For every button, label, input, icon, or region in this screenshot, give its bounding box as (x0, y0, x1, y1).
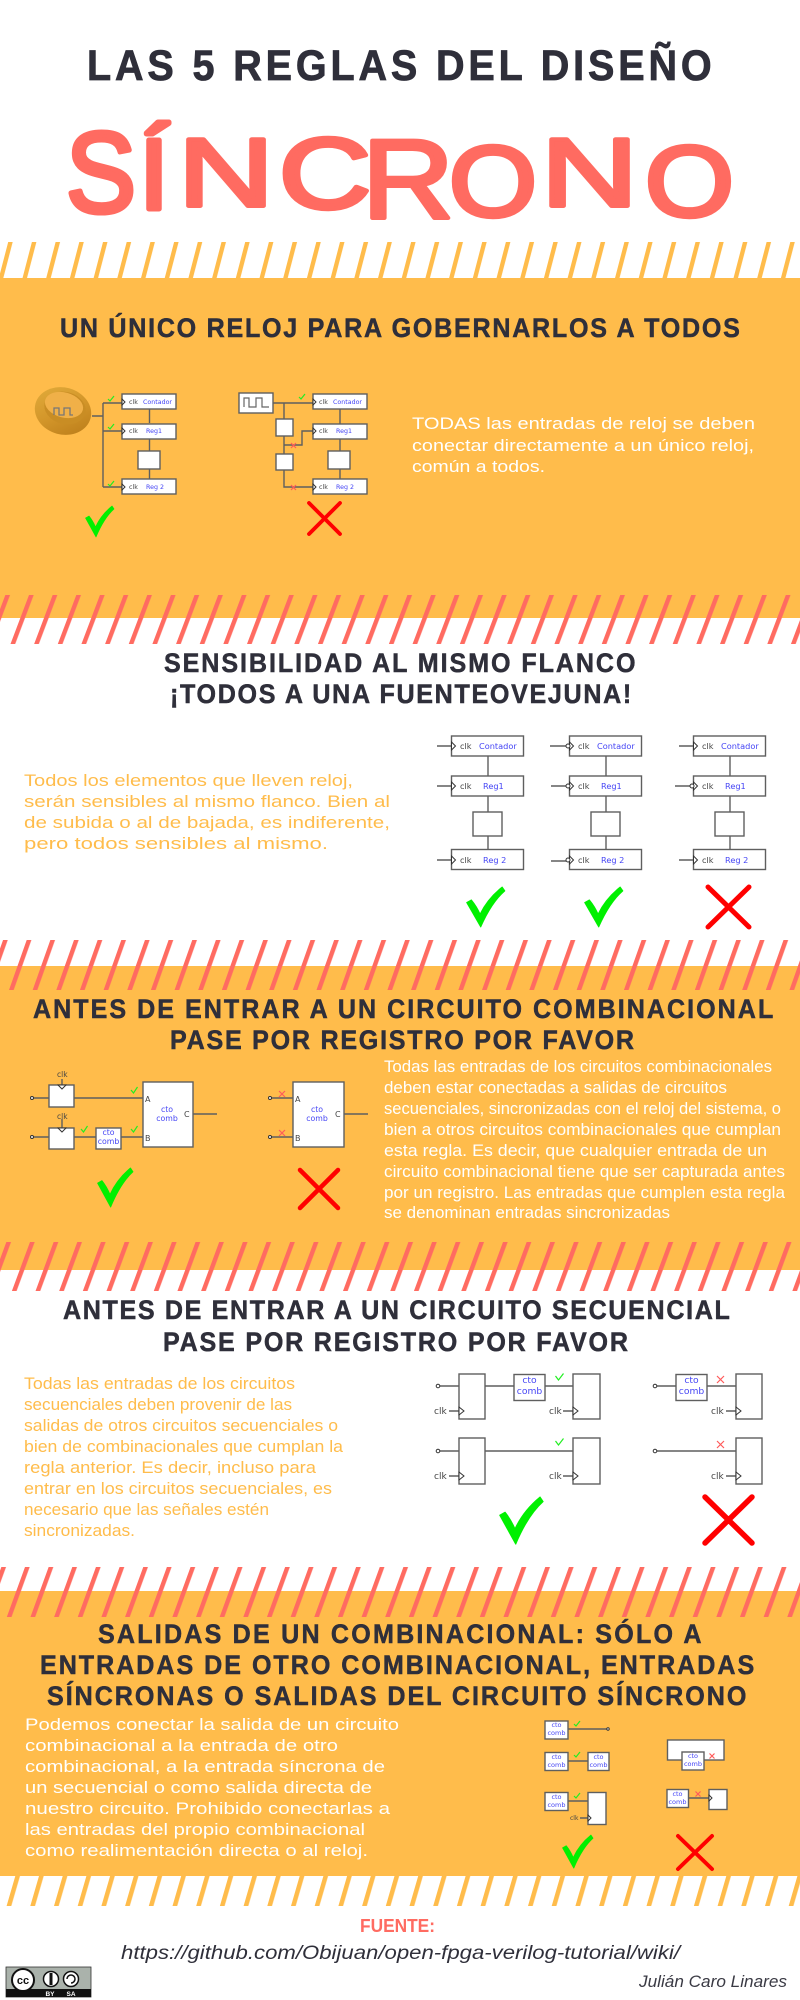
title: síncrono: R (362, 117, 454, 242)
text: regla 5 (25, 1716, 399, 1860)
text: regla 2: de subida o al de bajada, es indiferente, (24, 814, 390, 832)
diagram: correct sequential inputs: comb (517, 1386, 542, 1397)
diagram: wrong sequential inputs: comb (679, 1386, 704, 1397)
text: regla 4: regla anterior. Es decir, incluso para (24, 1459, 317, 1477)
text: regla 4 (24, 1375, 344, 1540)
text: regla 1: común a todos. (412, 458, 545, 476)
text: regla 4: secuenciales deben provenir de las (24, 1396, 292, 1414)
diagram: falling edge registers: Contador (597, 741, 635, 751)
diagram: wrong combinational inputs: cto (311, 1105, 323, 1114)
diagram: allowed combinational outputs: clk (570, 1815, 579, 1822)
diagram: wrong gated clock wiring: clk (319, 484, 328, 491)
diagram: correct combinational inputs: cto (102, 1128, 115, 1137)
icon: check rule 4 (500, 1497, 543, 1544)
diagram: mixed edge registers: Reg1 (725, 781, 746, 791)
diagram: correct combinational inputs: comb (98, 1137, 119, 1146)
footer: source url: https://github.com/Obijuan/open-fpga-verilog-tutorial/wiki/ (121, 1943, 682, 1964)
text: regla 4: sincronizadas. (24, 1522, 135, 1540)
diagram: rising edge registers (437, 736, 524, 870)
diagram: correct single clock wiring (92, 394, 176, 494)
diagram: correct single clock wiring: clk (129, 399, 138, 406)
text: regla 1: conectar directamente a un único reloj, (412, 437, 754, 455)
text: regla 5: nuestro circuito. Prohibido conectarlas a (25, 1800, 391, 1818)
heading: regla 2: ¡TODOS A UNA FUENTEOVEJUNA! (170, 678, 631, 709)
diagram: rising edge registers: clk (460, 855, 472, 865)
diagram: rising edge registers: Reg1 (483, 781, 504, 791)
diagram: forbidden combinational outputs: cto (672, 1790, 683, 1798)
text: regla 5: las entradas del propio combinacional (25, 1821, 365, 1839)
text: regla 5: combinacional a la entrada de otro (25, 1737, 338, 1755)
heading: regla 4: ANTES DE ENTRAR A UN CIRCUITO SECUENCIAL (63, 1294, 730, 1325)
diagram: wrong sequential inputs (653, 1374, 762, 1484)
diagram: correct combinational inputs: A (145, 1095, 151, 1104)
diagram: falling edge registers: clk (578, 855, 590, 865)
diagram: rising edge registers: clk (460, 781, 472, 791)
text: regla 3: bien a otros circuitos combinacionales que cumplan (384, 1121, 781, 1139)
footer: author: Julián Caro Linares (638, 1972, 788, 1991)
diagram: wrong sequential inputs: clk (711, 1472, 724, 1482)
diagram: wrong gated clock wiring: Reg 2 (336, 484, 354, 491)
text: regla 4: Todas las entradas de los circuitos (24, 1375, 295, 1393)
diagram: correct combinational inputs (30, 1070, 217, 1149)
diagram: mixed edge registers: Reg 2 (725, 855, 748, 865)
text: regla 1: TODAS las entradas de reloj se deben (412, 415, 755, 433)
diagram: correct sequential inputs (434, 1374, 600, 1484)
diagram: correct sequential inputs: cto (522, 1375, 537, 1386)
diagram: mixed edge registers: clk (702, 781, 714, 791)
diagram: allowed combinational outputs: cto (551, 1753, 562, 1761)
diagram: falling edge registers: Reg1 (601, 781, 622, 791)
diagram: wrong combinational inputs: A (295, 1095, 301, 1104)
diagram: wrong combinational inputs: B (295, 1134, 300, 1143)
panel: regla 5 salidas de un combinacional (25, 1618, 754, 1869)
heading: regla 5: SALIDAS DE UN COMBINACIONAL: SÓLO A (98, 1618, 702, 1649)
text: regla 3: esta regla. Es decir, que cualquier entrada de un (384, 1142, 767, 1160)
diagram: correct single clock wiring: clk (129, 484, 138, 491)
text: regla 3 (384, 1058, 786, 1222)
diagram: correct sequential inputs: clk (549, 1407, 562, 1417)
diagram: wrong combinational inputs: C (335, 1110, 341, 1119)
icon: big green check rule 1 (86, 506, 114, 537)
diagram: correct combinational inputs: C (184, 1110, 190, 1119)
diagram: wrong combinational inputs (268, 1082, 368, 1147)
diagram: allowed combinational outputs: cto (593, 1753, 604, 1761)
icon: check rule 5 (563, 1835, 593, 1868)
diagram: forbidden combinational outputs (667, 1740, 727, 1810)
diagram: mixed edge registers: clk (702, 741, 714, 751)
heading: regla 4: PASE POR REGISTRO POR FAVOR (163, 1326, 628, 1357)
diagram: allowed combinational outputs: cto (551, 1721, 562, 1729)
text: regla 5: como realimentación directa o al reloj. (25, 1842, 368, 1860)
icon: check column 1 (467, 887, 505, 927)
icon: cross rule 4 (705, 1497, 752, 1543)
footer: fuente label: FUENTE: (360, 1916, 435, 1936)
diagram: wrong gated clock wiring: clk (319, 428, 328, 435)
icon: creative commons by-sa badge: SA (66, 1991, 76, 1998)
text: regla 3: Todas las entradas de los circuitos combinacionales (384, 1058, 772, 1076)
heading: regla 3 (33, 993, 773, 1055)
diagram: wrong combinational inputs: comb (306, 1114, 328, 1123)
heading: regla 1: UN ÚNICO RELOJ PARA GOBERNARLOS A TODOS (60, 312, 740, 343)
diagram: wrong sequential inputs: cto (684, 1375, 699, 1386)
diagram: correct combinational inputs: clk (57, 1070, 68, 1079)
text: regla 3: se denominan entradas sincronizadas (384, 1204, 670, 1222)
diagram: wrong gated clock wiring: Contador (333, 399, 362, 406)
title: síncrono: C (279, 118, 371, 230)
icon: cross rule 5 (678, 1836, 712, 1869)
panel: regla 4 antes de un secuencial (24, 1294, 762, 1544)
heading: regla 5 (40, 1618, 754, 1711)
icon: cross rule 3 (300, 1170, 338, 1208)
text: regla 2: pero todos sensibles al mismo. (24, 835, 328, 853)
diagram: correct combinational inputs: cto (161, 1105, 173, 1114)
heading: regla 5: SÍNCRONAS O SALIDAS DEL CIRCUITO SÍNCRONO (47, 1680, 746, 1711)
diagram: correct combinational inputs: B (145, 1134, 150, 1143)
icon: creative commons by-sa badge: cc (17, 1975, 29, 1987)
diagram: forbidden combinational outputs: comb (684, 1760, 702, 1768)
diagram: mixed edge registers: Contador (721, 741, 759, 751)
title: síncrono: O (645, 126, 734, 238)
heading: regla 4 (63, 1294, 730, 1357)
diagram: rising edge registers: Contador (479, 741, 517, 751)
diagram: falling edge registers: clk (578, 741, 590, 751)
diagram: wrong gated clock wiring: Reg1 (336, 428, 352, 435)
text: regla 5: Podemos conectar la salida de un circuito (25, 1716, 399, 1734)
title: síncrono: Í (139, 119, 169, 231)
title: síncrono: O (449, 126, 537, 238)
icon: check rule 3 (98, 1168, 133, 1207)
text: regla 2: Todos los elementos que lleven reloj, (24, 772, 353, 790)
text: regla 4: salidas de otros circuitos secuenciales o (24, 1417, 338, 1435)
diagram: falling edge registers (550, 736, 642, 870)
panel: regla 2 sensibilidad al mismo flanco (24, 647, 766, 927)
text: regla 3: deben estar conectadas a salidas de circuitos (384, 1079, 727, 1097)
icon: golden ring with clock wave (29, 381, 97, 441)
diagram: allowed combinational outputs: comb (589, 1761, 608, 1769)
diagram: wrong gated clock wiring (239, 393, 367, 494)
text: regla 4: bien de combinacionales que cumplan la (24, 1438, 344, 1456)
icon: creative commons by-sa badge: BY (45, 1991, 55, 1998)
heading: regla 2: SENSIBILIDAD AL MISMO FLANCO (164, 647, 636, 678)
panel: regla 3 antes de un combinacional (30, 993, 786, 1222)
diagram: correct single clock wiring: clk (129, 428, 138, 435)
diagram: falling edge registers: Reg 2 (601, 855, 624, 865)
diagram: rising edge registers: clk (460, 741, 472, 751)
diagram: mixed edge registers: clk (702, 855, 714, 865)
icon: creative commons by-sa badge (6, 1967, 91, 1998)
icon: check column 2 (585, 887, 623, 927)
diagram: correct sequential inputs: clk (549, 1472, 562, 1482)
icon: big red cross rule 1 (309, 503, 340, 534)
heading: regla 3: PASE POR REGISTRO POR FAVOR (170, 1024, 634, 1055)
text: regla 3: por un registro. Las entradas que cumplen esta regla (384, 1184, 786, 1202)
diagram: wrong sequential inputs: clk (711, 1407, 724, 1417)
title: síncrono: N (178, 118, 274, 227)
text: regla 1 (412, 415, 755, 476)
diagram: allowed combinational outputs: cto (551, 1793, 562, 1801)
text: regla 5: combinacional, a la entrada síncrona de (25, 1758, 385, 1776)
heading: regla 2 (164, 647, 636, 709)
panel: regla 1 un único reloj (29, 312, 755, 537)
text: regla 3: secuenciales, sincronizadas con el reloj del sistema, o (384, 1100, 781, 1118)
text: regla 2 (24, 772, 390, 853)
diagram: allowed combinational outputs: comb (547, 1801, 566, 1809)
diagram: forbidden combinational outputs: cto (688, 1752, 698, 1760)
text: regla 2: serán sensibles al mismo flanco. Bien al (24, 793, 390, 811)
diagram: correct single clock wiring: Contador (143, 399, 172, 406)
diagram: forbidden combinational outputs: comb (668, 1798, 687, 1806)
title: síncrono: S (66, 110, 136, 237)
diagram: allowed combinational outputs (545, 1721, 609, 1824)
diagram: allowed combinational outputs: comb (547, 1729, 566, 1737)
text: regla 3: circuito combinacional tiene que ser capturada antes (384, 1163, 785, 1181)
diagram: wrong gated clock wiring: clk (319, 399, 328, 406)
diagram: rising edge registers: Reg 2 (483, 855, 506, 865)
heading: regla 5: ENTRADAS DE OTRO COMBINACIONAL, ENTRADAS (40, 1649, 754, 1680)
text: regla 5: un secuencial o como salida directa de (25, 1779, 372, 1797)
diagram: correct single clock wiring: Reg1 (146, 428, 162, 435)
icon: cross column 3 (708, 887, 749, 927)
diagram: correct sequential inputs: clk (434, 1472, 447, 1482)
diagram: correct sequential inputs: clk (434, 1407, 447, 1417)
text: regla 4: necesario que las señales estén (24, 1501, 269, 1519)
diagram: correct combinational inputs: clk (57, 1112, 68, 1121)
heading: regla 3: ANTES DE ENTRAR A UN CIRCUITO COMBINACIONAL (33, 993, 773, 1024)
title: las 5 reglas del diseño: LAS 5 REGLAS DEL DISEÑO (87, 41, 712, 89)
diagram: correct single clock wiring: Reg 2 (146, 484, 164, 491)
title: síncrono: N (541, 118, 638, 227)
diagram: allowed combinational outputs: comb (547, 1761, 566, 1769)
text: regla 4: entrar en los circuitos secuenciales, es (24, 1480, 332, 1498)
diagram: correct combinational inputs: comb (156, 1114, 178, 1123)
diagram: mixed edge registers (675, 736, 766, 870)
diagram: falling edge registers: clk (578, 781, 590, 791)
